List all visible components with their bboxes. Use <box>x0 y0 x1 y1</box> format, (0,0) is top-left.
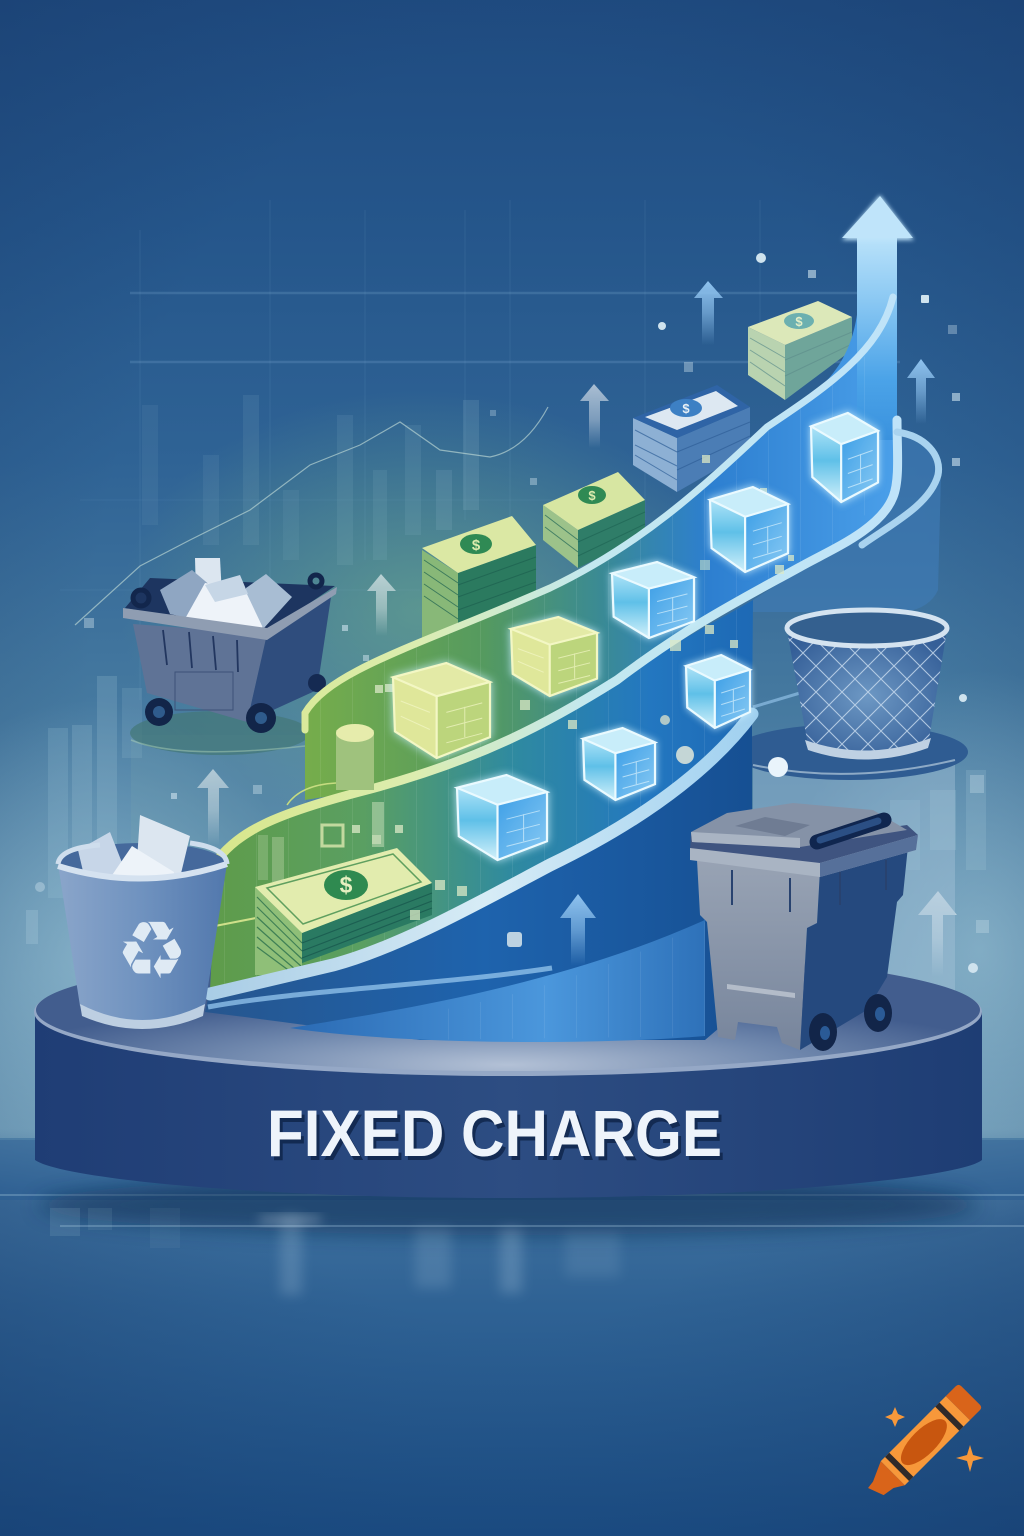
blue arrow on ribbon <box>560 894 596 966</box>
money stacks <box>422 301 852 642</box>
body front <box>697 860 820 1050</box>
stack: top right pale: $ <box>795 314 803 329</box>
arrow shaft fill <box>857 238 897 440</box>
right pedestal <box>732 724 968 1000</box>
lower ribbon grid <box>210 600 753 990</box>
left pedestal <box>130 711 310 855</box>
cube blue 6 <box>811 413 878 502</box>
stack: mid green <box>543 472 645 568</box>
ribbon edge lines <box>210 297 939 994</box>
recycle bin with paper <box>58 815 227 1029</box>
background grid <box>60 200 900 700</box>
back ribbon right <box>753 430 941 612</box>
arrow 2 <box>907 359 935 424</box>
cube blue 2 <box>583 728 655 800</box>
back ribbon edge <box>862 432 939 545</box>
ribbon dots <box>507 715 694 947</box>
cube blue 1 <box>457 775 547 860</box>
floating particles <box>35 253 989 973</box>
light base ribbon <box>290 920 705 1042</box>
title: FIXED CHARGE <box>267 1096 722 1170</box>
upper ribbon grid <box>305 340 875 800</box>
stack: top right pale <box>748 301 852 400</box>
stack: mid green: $ <box>588 488 596 503</box>
cube blue 4 <box>612 562 694 638</box>
cube green 1 <box>393 663 490 758</box>
roller <box>817 820 884 842</box>
trash paper <box>160 558 292 630</box>
lid <box>691 803 907 847</box>
back rim and interior <box>125 578 335 632</box>
body side <box>800 846 908 1050</box>
side <box>247 597 331 722</box>
stack: large green: $ <box>472 537 481 554</box>
dark base ribbon <box>205 712 752 1040</box>
hinges <box>133 590 149 606</box>
bin interior <box>58 843 226 885</box>
crayon <box>861 1383 983 1505</box>
stack: large green <box>422 516 536 642</box>
wheels <box>308 674 326 692</box>
large money stack: $ <box>340 872 353 898</box>
light base ribbon grid <box>420 922 705 1040</box>
crumpled paper <box>78 815 190 888</box>
main arrow head crisp <box>842 196 913 238</box>
line chart <box>75 407 548 625</box>
lid underside <box>690 825 918 866</box>
ribbon data squares <box>258 455 794 920</box>
cubes <box>393 413 878 860</box>
right side small stripe <box>753 693 800 707</box>
middle edge <box>217 420 898 860</box>
large money stack <box>255 848 432 975</box>
mesh waste basket <box>787 610 947 760</box>
lower ribbon band <box>210 600 753 990</box>
main rising arrow head <box>842 195 914 240</box>
crayon logo <box>861 1383 984 1505</box>
stack: blue: $ <box>682 401 690 416</box>
wheels <box>864 994 892 1032</box>
front <box>133 624 267 722</box>
rim <box>690 835 918 877</box>
upper ribbon band <box>305 238 898 800</box>
cube blue 5 <box>710 487 788 572</box>
green arc behind cylinder <box>287 783 336 805</box>
dumpster with trash <box>123 558 337 733</box>
star small <box>885 1407 905 1427</box>
faint background bars <box>26 395 986 944</box>
arrow 1 <box>694 281 723 345</box>
lower edge <box>210 714 752 994</box>
arrow 4 <box>367 574 396 636</box>
cube green 2 <box>511 617 597 696</box>
recycle icon: ♻ <box>116 904 188 997</box>
small swoosh <box>208 968 552 1007</box>
white dot <box>768 757 788 777</box>
arrow 3 <box>580 384 609 448</box>
top edge <box>305 297 893 730</box>
arrow 6 <box>918 891 957 977</box>
arrow 5 <box>197 769 229 845</box>
green ledge line <box>215 918 256 926</box>
rim <box>123 587 337 640</box>
grey wheelie bin <box>690 803 918 1051</box>
stack: blue <box>633 385 750 492</box>
floor reflection <box>50 1208 1024 1295</box>
cube blue 3 <box>686 655 750 728</box>
small green cylinder <box>336 724 374 790</box>
star large <box>956 1445 984 1472</box>
floating arrows <box>197 281 957 977</box>
platform <box>34 948 982 1235</box>
title: FIXED CHARGE <box>270 1100 725 1174</box>
